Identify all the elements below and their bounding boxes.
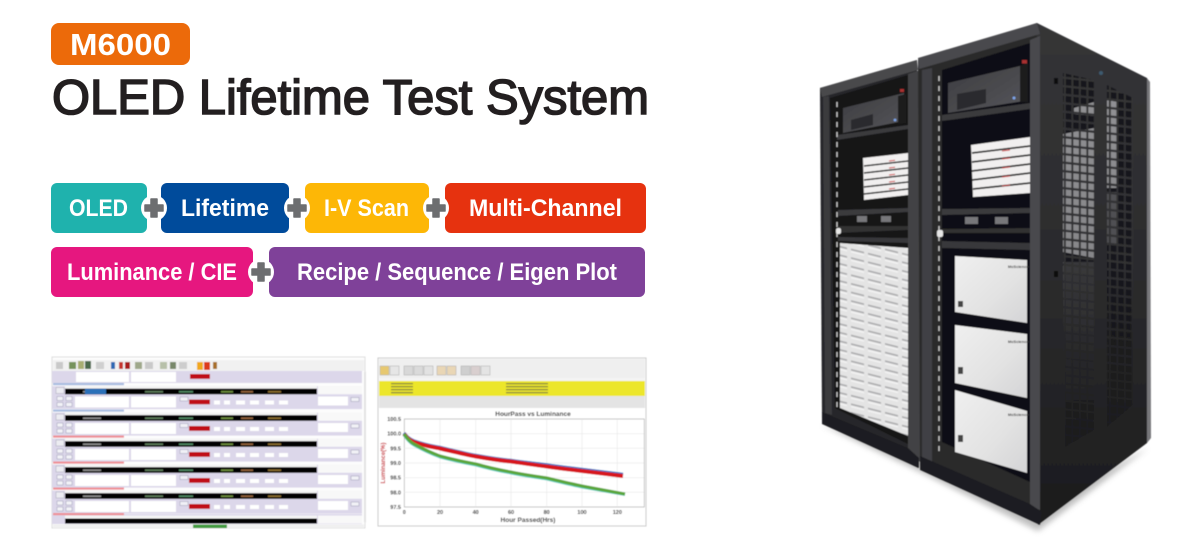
monitor toolbar (53, 360, 364, 371)
power unit 2 (955, 325, 1029, 398)
right rail (938, 76, 940, 455)
line chart (381, 417, 644, 524)
line chart: 100 (577, 510, 587, 516)
power unit 2: McScience (1008, 339, 1029, 344)
tag: OLED: OLED (69, 195, 128, 222)
plus connector 1 (141, 195, 167, 221)
tag: Multi-Channel (445, 183, 646, 233)
file list (379, 378, 645, 408)
line chart: 97.5 (390, 505, 401, 511)
tag: I-V Scan (305, 183, 429, 233)
tag: OLED (51, 183, 147, 233)
feature tags (51, 183, 646, 297)
line chart: 120 (613, 510, 622, 516)
side mesh column 2 (1107, 85, 1133, 427)
power unit 1 (955, 256, 1029, 323)
tag: I-V Scan: I-V Scan (324, 195, 409, 222)
power unit 3: McScience (1008, 412, 1029, 417)
line chart: 98.0 (390, 490, 401, 496)
line chart: 0 (403, 510, 406, 516)
software screenshot: luminance plot (378, 358, 646, 526)
line chart: 80 (544, 510, 550, 516)
product badge: M6000: M6000 (70, 27, 171, 62)
right cabinet white module stack (971, 137, 1030, 197)
right cabinet front (918, 23, 1042, 525)
tag: Recipe / Sequence / Eigen Plot: Recipe / Sequence / Eigen Plot (297, 259, 617, 286)
plus connector 3 (423, 195, 449, 221)
power unit 3 (955, 390, 1029, 473)
side mesh column 1 (1063, 73, 1094, 447)
software screenshot: multi-channel monitor (52, 357, 366, 528)
right cabinet computer (948, 60, 1028, 113)
line chart: 100.5 (387, 417, 401, 423)
tag: Lifetime: Lifetime (181, 195, 269, 222)
tag: Multi-Channel: Multi-Channel (469, 195, 622, 222)
title: OLED Lifetime Test System (52, 71, 649, 125)
plus connector 2 (284, 195, 310, 221)
power unit 1: McScience (1008, 264, 1029, 269)
line chart: 99.5 (390, 446, 401, 452)
left rail (836, 102, 838, 410)
left cabinet computer (843, 89, 906, 133)
monitor status bar (53, 524, 364, 528)
rack side panel (1037, 23, 1151, 525)
chart title: HourPass vs Luminance (495, 411, 571, 418)
right cabinet connectors (965, 217, 1008, 224)
tag: Lifetime (161, 183, 289, 233)
left cabinet white module stack (863, 153, 908, 200)
plot toolbar (379, 359, 645, 378)
line chart: 98.5 (390, 476, 401, 482)
line chart: Luminance(%) (381, 442, 387, 484)
monitor first channel panel (52, 371, 362, 383)
line chart: Hour Passed(Hrs) (501, 517, 555, 524)
left cabinet louvered panel (840, 243, 908, 436)
line chart: 40 (473, 510, 479, 516)
left cabinet connectors (857, 216, 891, 222)
left cabinet (820, 60, 920, 468)
tag: Luminance / CIE (51, 247, 253, 297)
channel strips (53, 383, 124, 515)
line chart: 100.0 (387, 432, 401, 438)
plus connector 4 (248, 259, 274, 285)
product badge: M6000 (51, 23, 190, 65)
monitor scrollbar (364, 372, 366, 522)
line chart: 99.0 (390, 461, 401, 467)
channel rows (52, 386, 362, 524)
server rack system photo (820, 23, 1151, 531)
line chart: 60 (508, 510, 514, 516)
rack floor shadow (822, 425, 1148, 531)
tag: Luminance / CIE: Luminance / CIE (67, 259, 237, 286)
line chart: 20 (437, 510, 443, 516)
tag: Recipe / Sequence / Eigen Plot (269, 247, 645, 297)
